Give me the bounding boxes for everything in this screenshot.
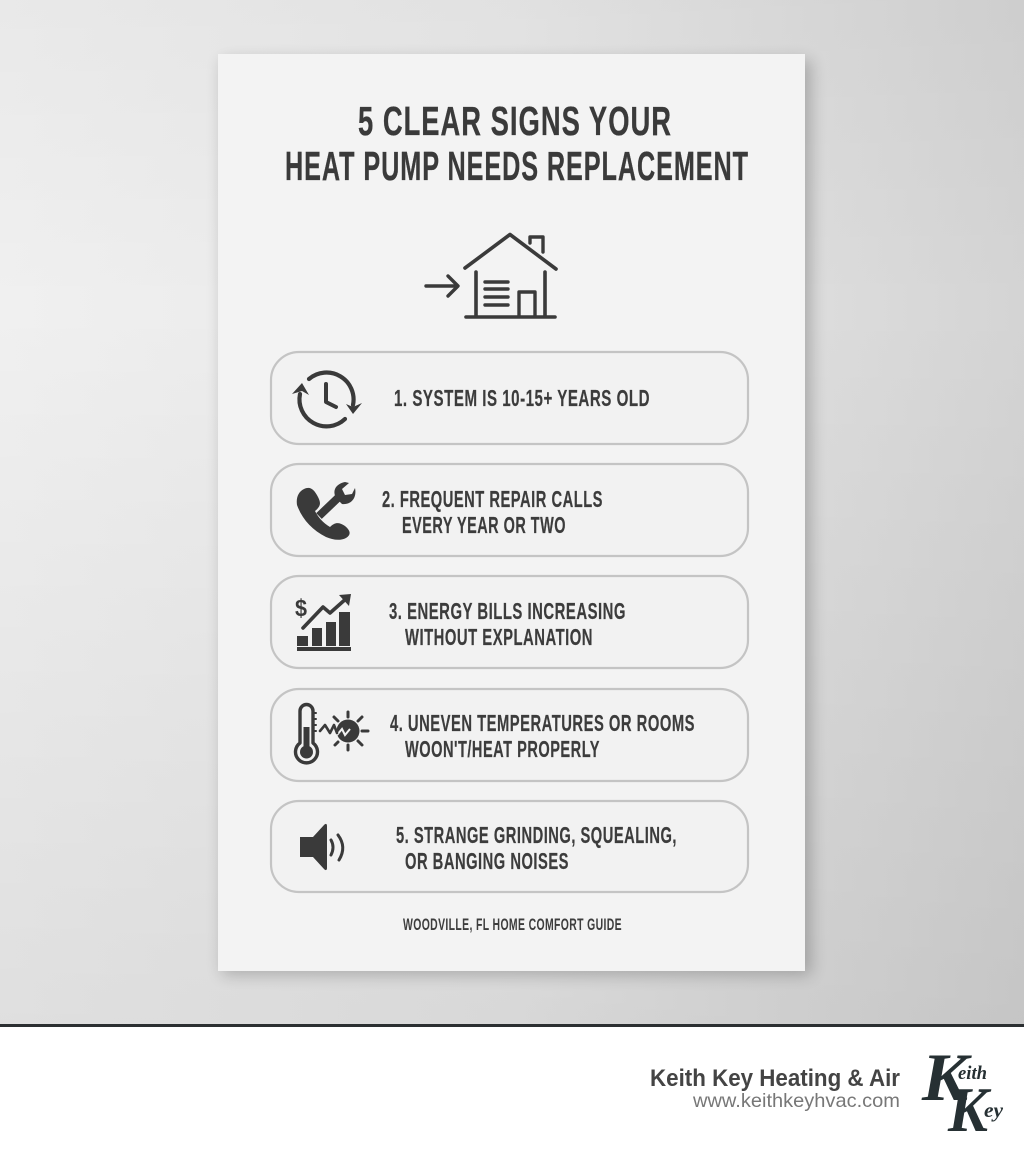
footer band xyxy=(0,1024,1024,1154)
text: sign 1: 1. SYSTEM IS 10-15+ YEARS OLD xyxy=(394,385,650,411)
text: sign 4 xyxy=(390,710,695,762)
icon: phone and wrench xyxy=(297,482,355,540)
title: 5 CLEAR SIGNS YOUR xyxy=(358,98,672,144)
text: sign 5: 5. STRANGE GRINDING, SQUEALING, xyxy=(396,822,677,848)
panel: card xyxy=(218,54,805,971)
text: sign 2: EVERY YEAR OR TWO xyxy=(402,512,566,538)
text: sign 3: 3. ENERGY BILLS INCREASING xyxy=(389,598,626,624)
text: sign 2 xyxy=(382,486,603,538)
panel: sign 1 xyxy=(271,352,748,444)
text: sign 2: 2. FREQUENT REPAIR CALLS xyxy=(382,486,603,512)
text: sign 3: WITHOUT EXPLANATION xyxy=(405,624,593,650)
text: sign 5 xyxy=(396,822,677,874)
text: sign 4: WOON'T/HEAT PROPERLY xyxy=(405,736,600,762)
company website: www.keithkeyhvac.com xyxy=(692,1090,900,1112)
icon: clock with cycle arrows xyxy=(292,373,362,426)
footnote: WOODVILLE, FL HOME COMFORT GUIDE xyxy=(403,915,622,934)
text: sign 3 xyxy=(389,598,626,650)
logo: eith xyxy=(958,1063,987,1084)
text: sign 4: 4. UNEVEN TEMPERATURES OR ROOMS xyxy=(390,710,695,736)
logo: ey xyxy=(984,1100,1003,1122)
icon: speaker xyxy=(300,824,343,870)
icon: rising bills chart: $ xyxy=(295,595,308,622)
icon: thermometer and sun xyxy=(296,705,368,763)
panel: sign 3 xyxy=(271,576,748,668)
logo xyxy=(921,1039,1003,1145)
text: sign 5: OR BANGING NOISES xyxy=(405,848,569,874)
title: HEAT PUMP NEEDS REPLACEMENT xyxy=(285,143,749,189)
title xyxy=(285,98,749,189)
icon: house with arrow xyxy=(426,234,556,317)
panel: sign 4 xyxy=(271,689,748,781)
icon: rising bills chart xyxy=(295,594,351,651)
logo: K xyxy=(947,1074,992,1145)
panel: sign 5 xyxy=(271,801,748,892)
logo: K xyxy=(921,1039,973,1115)
card shadow xyxy=(222,60,811,975)
panel: sign 2 xyxy=(271,464,748,556)
company name: Keith Key Heating & Air xyxy=(650,1065,900,1092)
